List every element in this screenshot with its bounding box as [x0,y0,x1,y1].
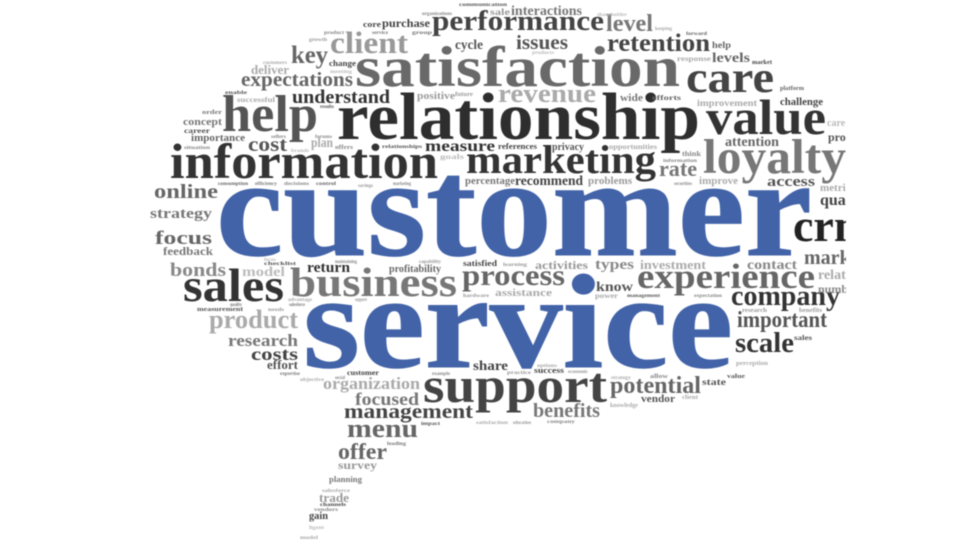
small words: product [324,31,344,36]
small words: number [818,282,859,296]
small words: quality [820,192,868,209]
small words: growth [309,38,327,43]
small words: privacy [552,142,584,153]
small words: practice [507,371,532,376]
small words: benefits [799,308,823,314]
small words: communication [459,3,507,8]
small words: products [532,51,554,56]
medium words: cycle [455,38,483,53]
small words: positive [417,90,455,102]
small words: plan [311,136,333,151]
medium words: access [767,174,815,190]
small words: metric [820,182,851,194]
medium words [150,4,840,422]
medium words: potential [610,373,701,399]
small words: forward [686,32,707,37]
speech bubble tail words: management [344,399,473,423]
small words: power [595,292,618,300]
small words: economic [568,370,589,375]
small words: wide [620,93,644,104]
speech bubble tail words: menu [347,414,418,443]
medium words: scale [735,328,794,359]
small words: allow [650,374,669,380]
medium words: return [307,260,351,276]
medium words: company [731,281,840,312]
small words: sale [490,7,510,17]
small words: quality [230,303,242,308]
small words: information [663,159,697,164]
medium words: benefits [533,400,600,422]
large words: help [222,86,318,143]
medium words: know [596,280,634,295]
medium words: focus [155,228,212,249]
small words: objective [300,378,325,383]
small words: options [537,364,557,369]
keyword: service: service [303,248,733,396]
large words: sales [183,260,284,312]
speech bubble tail words [300,399,473,540]
small words: impact [421,422,440,427]
medium words: cost [248,134,287,156]
medium words: costs [251,344,298,364]
small words: platform [780,86,804,92]
small words: support [355,298,367,303]
large words: experience [637,257,815,296]
small words: shareholder [597,13,628,18]
small words: think [682,150,701,158]
small words: goals [440,153,464,161]
small words: focus [264,258,276,263]
small words: core [363,20,382,29]
small words: percentage [465,176,516,187]
speech bubble tail words: survey [338,458,377,472]
word cloud: speech bubble [150,2,847,540]
medium words: research [228,331,299,350]
speech bubble tail words: leading [387,442,407,447]
small words: references [498,142,537,151]
small words: consumption [218,182,248,187]
large words: satisfaction [355,36,680,99]
medium words: levels [712,51,751,66]
small words: client [682,395,698,401]
small words: example [432,372,451,377]
small words: needs [268,308,284,313]
small words: education [513,421,531,426]
small words: change [329,59,357,68]
speech bubble tail words: trade [319,490,349,505]
large words: marketing [466,137,656,182]
small words: customers [263,61,287,66]
small words: decisions [284,182,309,187]
large words: relationship [337,80,700,154]
medium words: contact [747,258,797,273]
small words: brands [291,149,309,154]
small words: problems [588,176,632,187]
large words: value [706,89,826,145]
medium words: retention [607,30,710,57]
small words: salesforce [289,303,306,308]
small words: hardware [463,294,490,299]
small words: forums [315,135,332,140]
small words: maintaining [335,260,357,265]
small words: learning [503,263,528,268]
small words: capability [419,260,442,265]
small words: measurement [197,307,243,313]
small words: relationships [382,145,422,150]
small words: future [455,92,473,98]
speech bubble tail words: gain [309,511,328,522]
small words: organizations [422,12,452,17]
medium words: expectations [241,69,353,91]
small words: expertise [280,372,301,377]
medium words: activities [535,258,588,272]
small words: marketing [393,182,411,187]
small words: care [827,118,846,129]
small words: keeping [655,27,673,32]
medium words: product [209,305,298,334]
large words: information [170,133,438,189]
medium words: investment [640,257,707,272]
small words: control [316,182,337,187]
small words: management [627,293,660,299]
large words: process [462,259,565,292]
small words: customer [347,369,379,377]
large words [170,36,872,413]
medium words: measure [425,138,495,155]
small words: response [677,55,711,63]
medium words: types [595,257,634,273]
medium words: bonds [170,260,226,281]
medium words: understand [292,87,390,108]
small words: improvement [697,98,757,108]
small words: company [547,420,576,425]
small words: improve [699,176,739,187]
speech bubble tail words: offer [338,439,387,464]
medium words: online [154,181,218,203]
small words: offers [335,145,354,151]
small words: concept [183,116,222,128]
small words: research [742,308,768,314]
small words: market [804,247,867,269]
small words: service [372,31,389,36]
medium words: organization [323,374,421,393]
medium words: important [737,307,827,332]
small words: savings [358,184,373,189]
medium words: strategy [150,206,213,222]
small words: perception [736,361,769,367]
small words: success [534,366,564,375]
small words: relationship [818,268,890,283]
small words: importance [191,132,245,144]
medium words: focused [355,389,419,409]
large words: crm [793,200,872,251]
small words: checklist [264,262,297,267]
small words: market [752,60,772,66]
small words: situation [184,146,210,151]
small words: efficiency [255,182,278,187]
medium words: model [242,265,285,280]
large words: business [290,259,457,305]
keyword: customer: customer [216,131,812,286]
medium words: level [606,11,653,37]
small words: expectation [694,294,722,299]
medium words: vendor [641,394,676,405]
large words: care [686,53,774,102]
small words: opportunities [609,143,657,151]
speech bubble tail words: salesforce [322,489,351,494]
small words: enable [225,91,248,96]
small words: pro [828,130,846,144]
medium words: effort [267,357,299,372]
small words: successful [237,96,275,104]
small words: career [184,127,210,135]
medium words: rate [659,156,697,181]
speech bubble tail words: vendors [314,508,338,513]
small words: efforts [652,94,681,102]
medium words: issues [516,32,568,54]
small words [183,3,890,427]
small words: help [712,40,731,50]
small words: results [320,105,334,110]
medium words: profitability [389,264,441,275]
medium words: feedback [163,244,213,258]
large words: loyalty [703,129,847,184]
small words: knowledge [610,403,638,409]
medium words: deliver [251,62,289,77]
small words: value [727,374,745,380]
small words: order [202,110,222,116]
large words: support [423,357,607,413]
small words: meeting [330,70,353,75]
medium words: state [702,377,726,387]
medium words: revenue [498,79,596,108]
small words: satisfaction [476,421,508,426]
medium words: client [330,25,409,60]
small words: social [335,376,346,381]
medium words: share [473,359,508,374]
medium words: assistance [495,287,552,299]
medium words: challenge [780,97,824,108]
small words: strategy [611,376,632,381]
small words: purchase [382,16,431,30]
speech bubble tail words: ligent [309,526,324,531]
small words: sellers [271,135,286,140]
medium words: interactions [511,4,583,19]
small words: sales [794,334,812,342]
speech bubble tail words: channels [320,503,346,508]
small words: satisfied [463,259,498,268]
speech bubble tail words: planning [329,475,362,484]
medium words: attention [725,135,779,150]
small words: advantage [288,298,313,303]
small words: securities [674,182,692,187]
medium words: recommend [515,174,583,189]
small words: group [412,31,432,36]
medium words: key [291,42,328,69]
medium words: performance [432,5,604,37]
